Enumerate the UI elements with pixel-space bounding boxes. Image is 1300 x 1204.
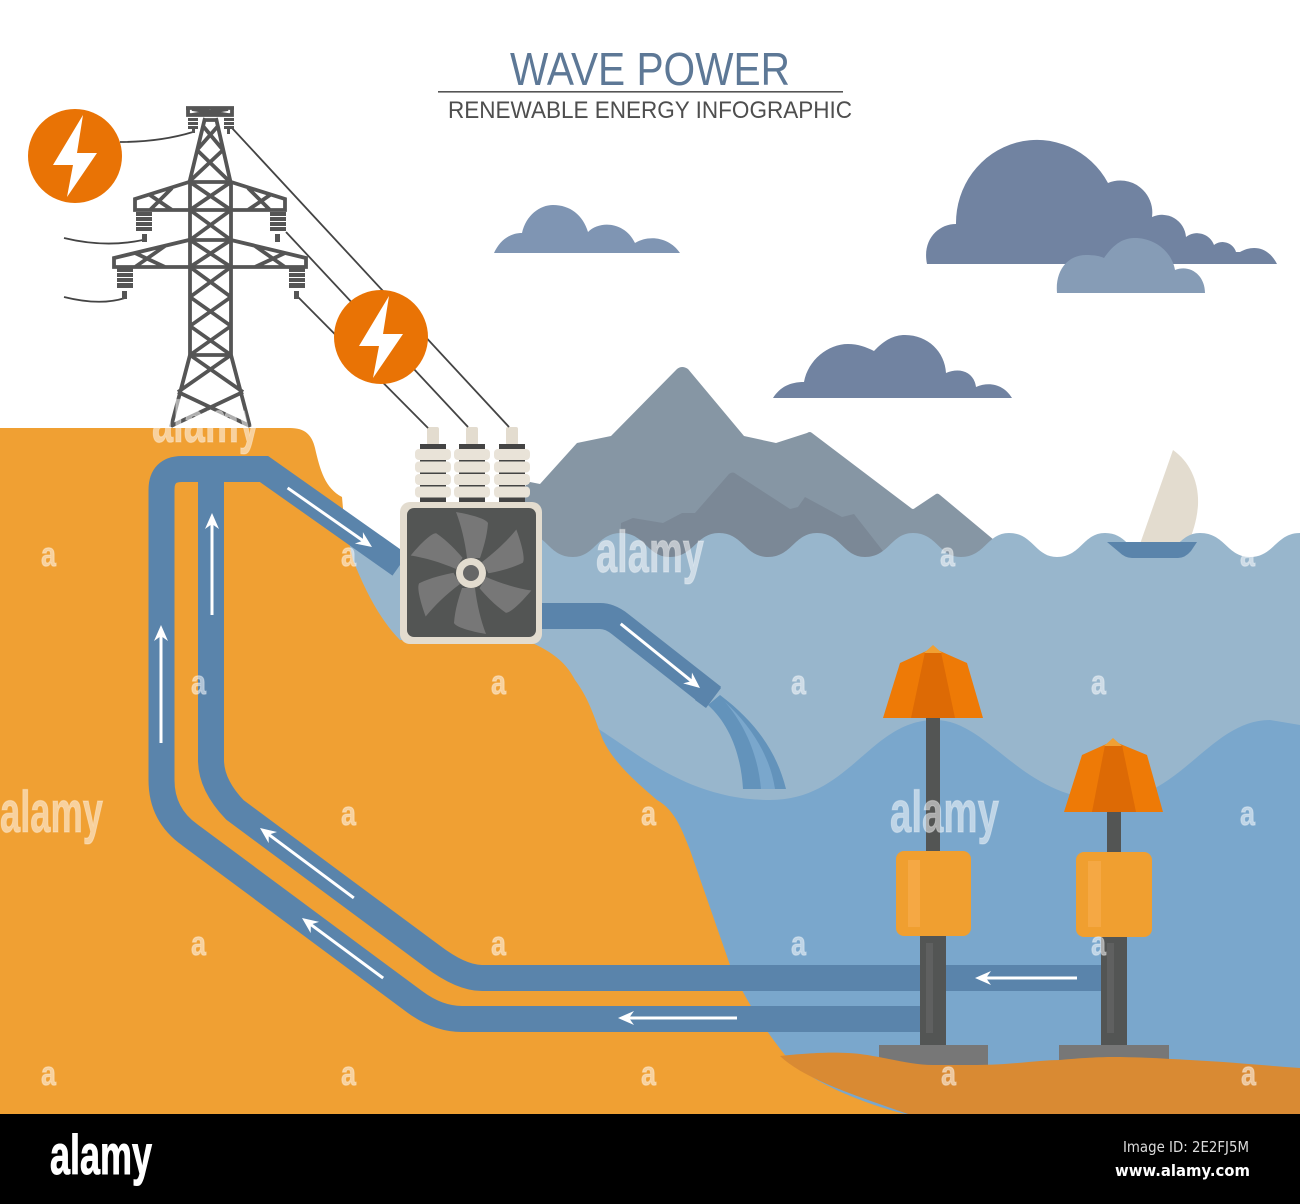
- pylon body: [190, 182, 231, 355]
- land cliff: [0, 428, 905, 1114]
- website: www.alamy.com: [1115, 1161, 1250, 1180]
- pylon arm one: [135, 182, 285, 210]
- image id: Image ID: 2E2FJ5M: [1123, 1138, 1249, 1156]
- watermarks: a: [341, 1055, 357, 1093]
- pylon legs: [171, 355, 250, 427]
- sail: [1140, 450, 1198, 544]
- water stream: [708, 695, 786, 789]
- title block: [438, 43, 852, 124]
- watermarks: [0, 390, 1257, 1093]
- watermarks: a: [1091, 925, 1107, 963]
- sea: [345, 525, 1300, 1114]
- watermarks: alamy: [152, 390, 260, 455]
- flow arrows: [154, 482, 1077, 1025]
- deep water: [590, 720, 1300, 1114]
- watermarks: a: [791, 664, 807, 702]
- watermarks: a: [641, 1055, 657, 1093]
- transformer insulators: [415, 427, 530, 502]
- pylon insulators: [117, 118, 305, 299]
- watermarks: a: [1241, 1055, 1257, 1093]
- watermarks: alamy: [890, 780, 999, 845]
- watermarks: a: [491, 925, 507, 963]
- watermarks: a: [940, 536, 956, 574]
- cloud: lower: [773, 335, 1012, 398]
- footer bar: [0, 1114, 1300, 1204]
- insulator stack left: [415, 427, 451, 502]
- fan blades: [410, 512, 532, 634]
- fan hub: [456, 558, 486, 588]
- watermarks: a: [341, 536, 357, 574]
- cloud: large: [926, 140, 1277, 264]
- boat hull: [1107, 542, 1197, 558]
- pylon top frame: [186, 107, 234, 115]
- buoy left float: [896, 851, 971, 936]
- watermarks: alamy: [596, 520, 704, 585]
- cloud: light overlapping: [1057, 238, 1205, 293]
- pylon: [114, 107, 306, 427]
- cloud: small top: [494, 205, 680, 253]
- watermarks: a: [641, 795, 657, 833]
- watermarks: a: [41, 536, 57, 574]
- watermarks: a: [1240, 795, 1256, 833]
- insulator stack middle: [454, 427, 490, 502]
- insulator stack right: [494, 427, 530, 502]
- seabed: [780, 1053, 1300, 1114]
- outflow pipe and stream: [540, 616, 786, 789]
- buoy right float: [1076, 852, 1152, 937]
- subheading: RENEWABLE ENERGY INFOGRAPHIC: [448, 97, 852, 124]
- turbine housing with fan: [400, 502, 542, 644]
- icon: electricity badge upper: [28, 109, 122, 203]
- watermarks: a: [341, 795, 357, 833]
- buoy left head: [883, 648, 983, 718]
- watermarks: a: [941, 1055, 957, 1093]
- heading: wave power: WAVE POWER: [510, 43, 790, 95]
- pylon upper section: [189, 118, 231, 184]
- watermarks: a: [191, 925, 207, 963]
- power lines: [64, 128, 509, 428]
- mountains: [520, 367, 1000, 570]
- footer logo: alamy: [50, 1123, 152, 1186]
- icon: electricity badge lower: [334, 290, 428, 384]
- pylon arm two: [114, 240, 306, 267]
- sailboat: [1140, 450, 1198, 544]
- watermarks: a: [41, 1055, 57, 1093]
- pipe: inner upper: [211, 475, 1110, 978]
- outflow pipe: [540, 616, 713, 697]
- wave energy buoy right: [1059, 738, 1169, 1065]
- watermarks: a: [191, 664, 207, 702]
- watermarks: alamy: [0, 780, 103, 845]
- watermarks: a: [1240, 536, 1256, 574]
- watermarks: a: [1091, 664, 1107, 702]
- pipe: outer with turbine feed: [162, 469, 925, 1019]
- buoy right head: [1064, 741, 1163, 812]
- underground pipes: [162, 469, 1110, 1019]
- wave energy buoy left: [879, 645, 988, 1066]
- watermarks: a: [791, 925, 807, 963]
- watermarks: a: [491, 664, 507, 702]
